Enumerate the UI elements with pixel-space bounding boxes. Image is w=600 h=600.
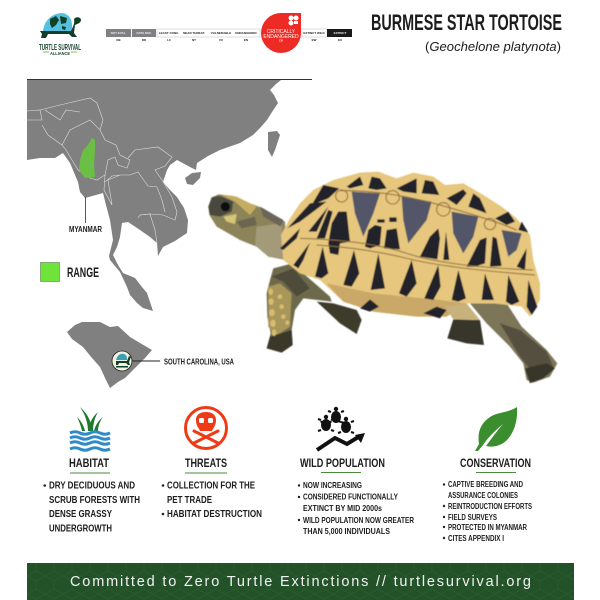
country borders [27,98,177,243]
icon: leaf [475,407,517,451]
critically endangered badge [261,13,301,53]
label: South Carolina: SOUTH CAROLINA, USA [164,358,234,367]
panel: threats [162,408,262,520]
marker line [131,360,160,362]
text block: WILD POPULATION NOW GREATER [303,515,414,525]
IUCN conservation status bar: EX [338,38,342,42]
text block [298,480,414,536]
icon: skull and crossbones [186,408,226,448]
text block [43,481,140,535]
legend: range [40,262,99,282]
heading: CONSERVATION [460,456,531,470]
IUCN conservation status bar: EN [244,38,248,42]
IUCN conservation status bar: NEAR THREAT. [183,31,205,35]
text block: CITES APPENDIX I [448,534,504,543]
shell: blue-grey central scutes [352,192,522,257]
IUCN conservation status bar: DATA DEF. [136,31,152,35]
icon: grass and water [70,407,110,450]
panel: conservation [443,407,532,543]
IUCN conservation status bar: ENDANGERED [235,31,257,35]
text block: SCRUB FORESTS WITH [49,495,140,506]
text block [162,481,262,520]
neck and head [208,194,287,260]
critically endangered badge: CRITICALLY [267,29,296,35]
text block: DRY DECIDUOUS AND [49,481,135,492]
label: Myanmar: MYANMAR [69,225,102,234]
range polygon [79,138,95,178]
text block: EXTINCT BY MID 2000s [303,503,382,513]
shell: growth rings [300,190,535,275]
IUCN conservation status bar: EXTINCT WILD [303,31,325,35]
text block: CAPTIVE BREEDING AND [448,480,523,489]
logo: Turtle Survival Alliance: ALLIANCE [50,51,70,56]
logo: Turtle Survival Alliance [39,13,81,56]
critically endangered badge: ENDANGERED [263,34,299,40]
legend: range: RANGE [67,264,99,280]
shell [281,172,540,317]
logo: Turtle Survival Alliance: TURTLE SURVIVAL [39,43,81,52]
IUCN conservation status bar: NT [192,38,196,42]
text block: NOW INCREASING [303,480,362,490]
text block: UNDERGROWTH [49,524,112,535]
map top rule [27,79,312,80]
marker: TSA logo circle [112,351,132,371]
panel: habitat [43,407,140,535]
island: Hainan [185,172,201,185]
text block: REINTRODUCTION EFFORTS [448,502,532,511]
IUCN conservation status bar [106,13,352,53]
IUCN conservation status bar: NE [116,38,121,42]
IUCN conservation status bar: VULNERABLE [211,31,231,35]
text block: ASSURANCE COLONIES [448,491,518,500]
scientific name: (Geochelone platynota ) [425,40,561,54]
text block: HABITAT DESTRUCTION [167,509,262,520]
rear legs [317,302,362,334]
map: South Carolina [67,322,234,388]
IUCN conservation status bar: NOT EVAL. [111,31,127,35]
text block: FIELD SURVEYS [448,513,498,522]
text block [443,480,532,543]
heading: WILD POPULATION [300,456,385,470]
island: Taiwan [268,131,280,157]
shell: dark star markings [280,177,537,318]
critically endangered badge: CR [279,38,284,42]
heading: THREATS [185,456,227,470]
footer banner [27,563,574,600]
IUCN conservation status bar: LEAST CONC. [159,31,179,35]
plastron piece [445,303,480,320]
text block: PROTECTED IN MYANMAR [448,523,527,532]
footer text: Committed to Zero Turtle Extinctions // turtlesurvival.org [70,574,531,590]
heading: HABITAT [69,456,110,470]
IUCN conservation status bar: VU [219,38,223,42]
text block: PET TRADE [167,495,212,506]
front leg [267,264,332,353]
label: Myanmar [69,197,102,234]
text block: DENSE GRASSY [49,509,112,520]
IUCN conservation status bar: EW [312,38,317,42]
text block: COLLECTION FOR THE [167,481,255,492]
IUCN conservation status bar: EXTINCT [334,31,347,35]
panel: wild population [298,407,414,536]
icon: turtles and rising arrow [317,407,365,450]
text block: CONSIDERED FUNCTIONALLY [303,492,398,502]
IUCN conservation status bar: DD [142,38,147,42]
map: Southeast Asia range [27,79,312,311]
tortoise illustration [208,172,557,383]
IUCN conservation status bar: LC [167,38,172,42]
text block: THAN 5,000 INDIVIDUALS [303,526,390,536]
